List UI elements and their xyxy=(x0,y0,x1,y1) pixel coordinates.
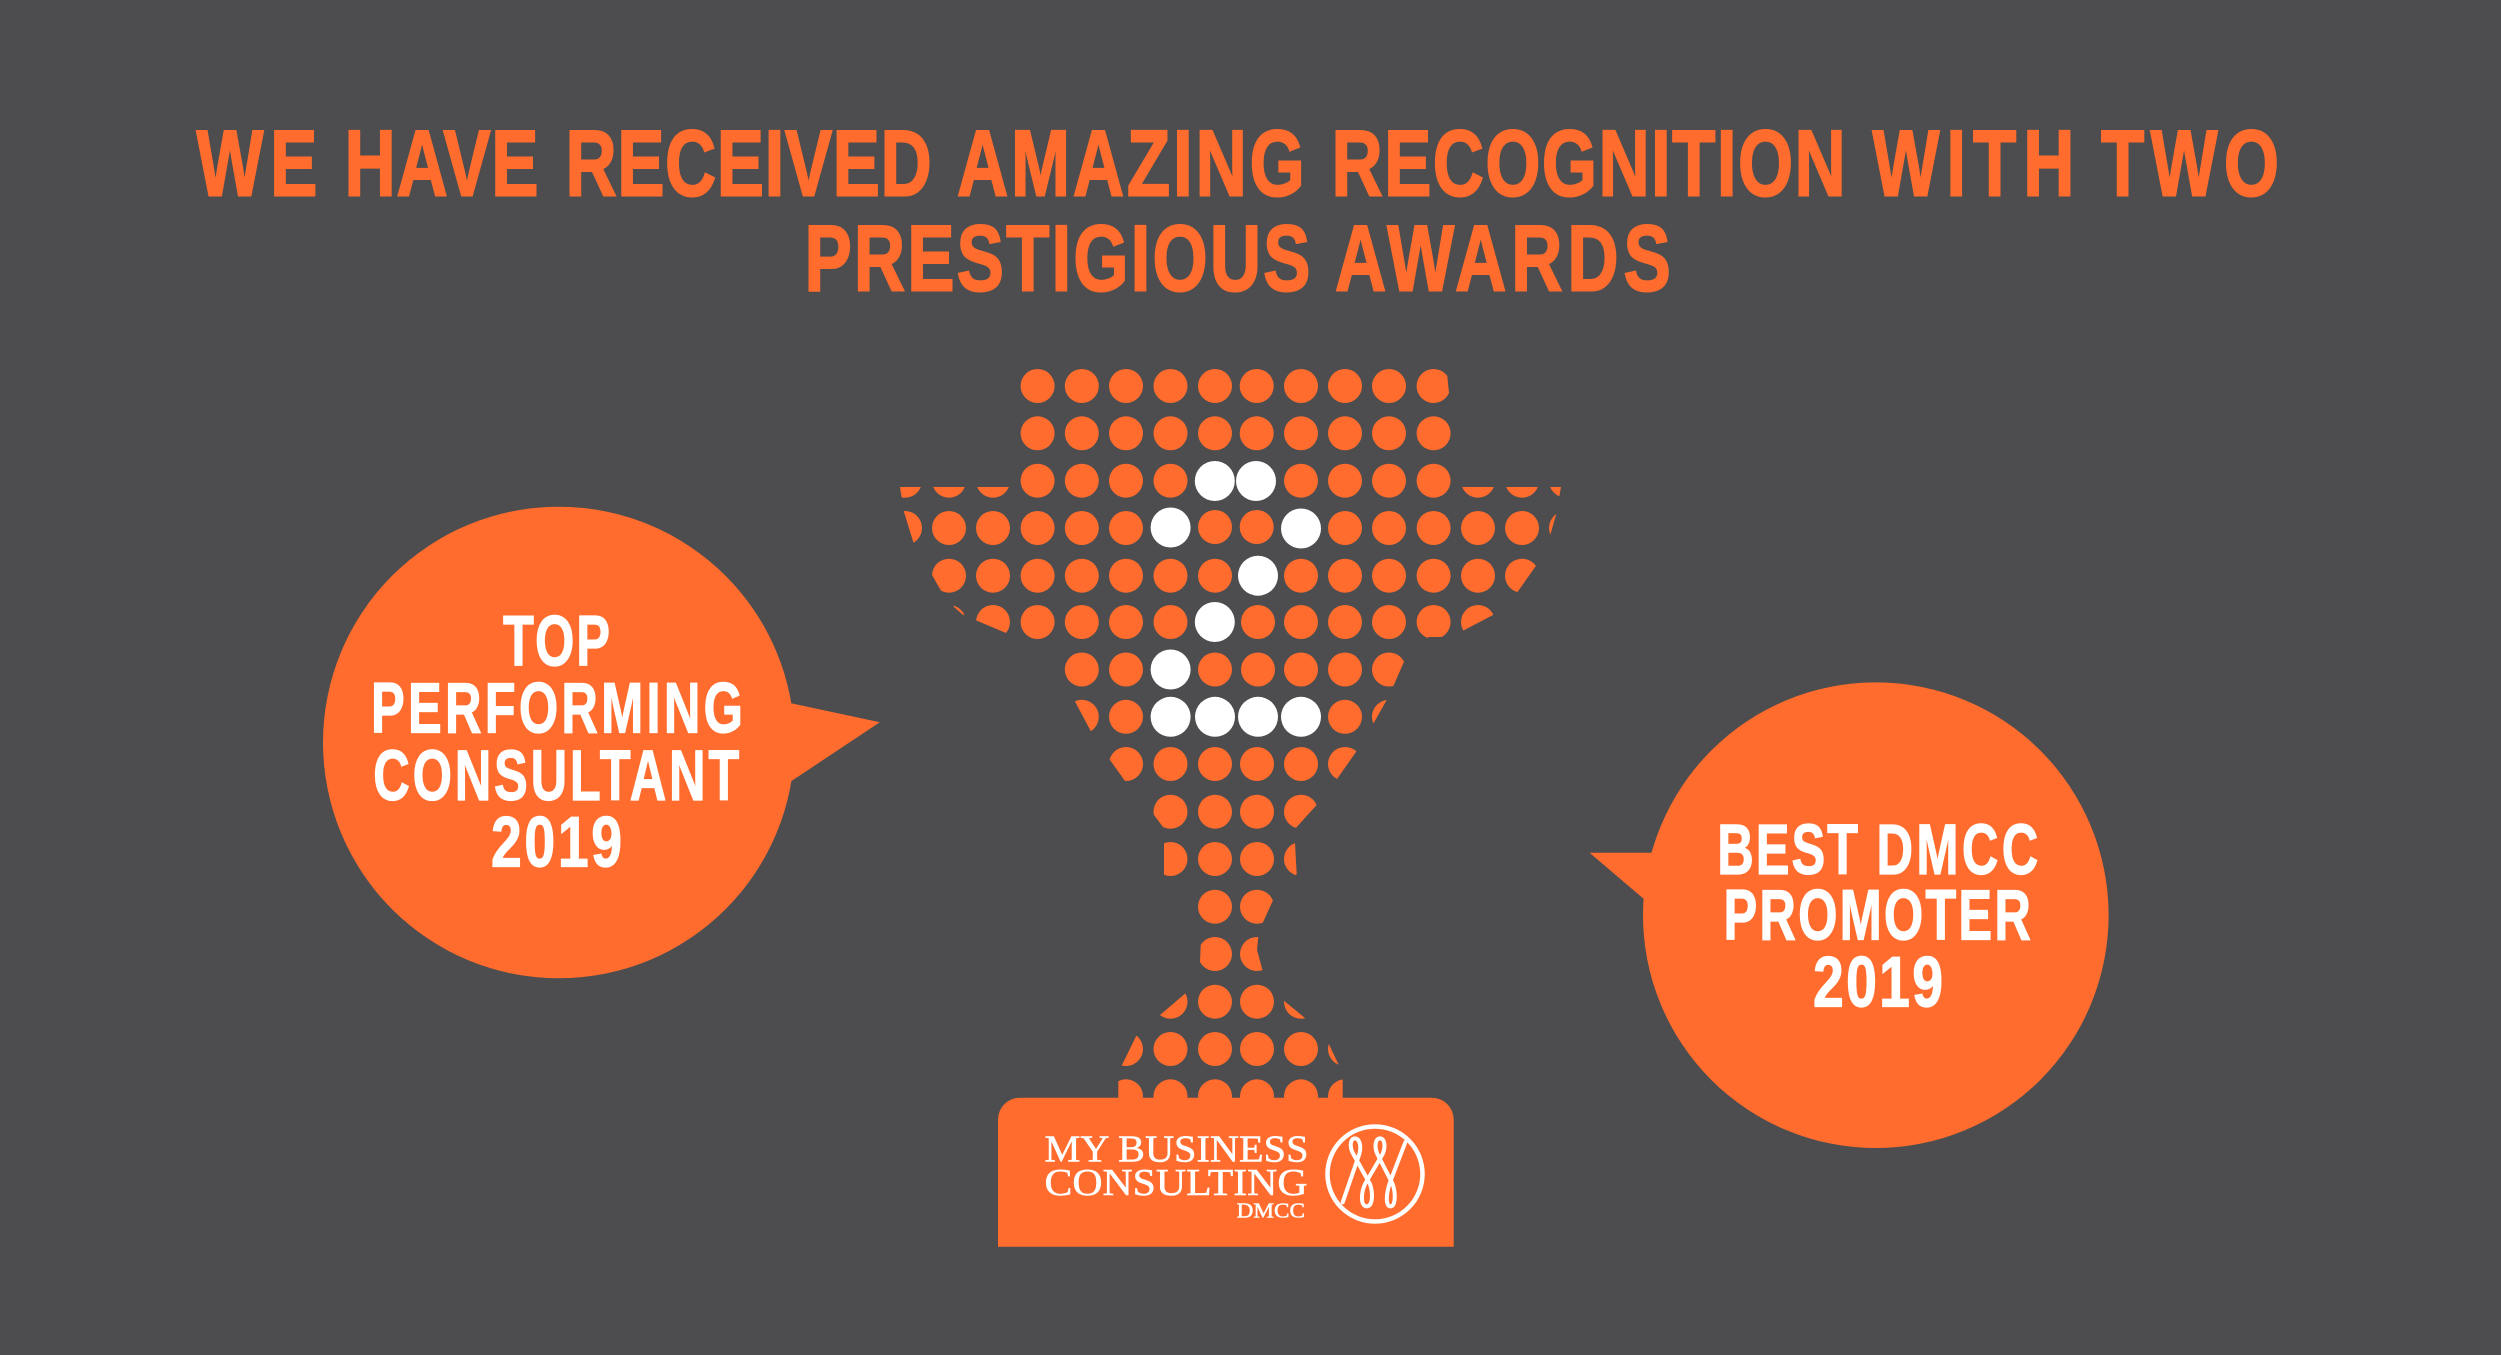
title: AWARDS xyxy=(1335,206,1671,311)
icon: dotted trophy xyxy=(888,369,1583,1247)
award text: top performing consultant 2019 xyxy=(371,602,743,882)
panel: left award speech bubble xyxy=(323,507,880,978)
award text: best dmcc promoter 2019 xyxy=(1717,811,2038,1022)
title: RECOGNITION xyxy=(1332,111,1846,216)
trophy cup and stem dots xyxy=(888,369,1583,1113)
award text: best dmcc promoter 2019: BEST xyxy=(1717,811,1858,890)
award text: best dmcc promoter 2019: 2019 xyxy=(1813,943,1943,1022)
award text: top performing consultant 2019: 2019 xyxy=(491,803,622,882)
white dots forming the number 2 xyxy=(1151,461,1321,737)
title: TWO xyxy=(2101,111,2279,216)
award text: best dmcc promoter 2019: DMCC xyxy=(1876,811,2038,890)
title xyxy=(196,111,2279,311)
panel: right award speech bubble xyxy=(1590,682,2109,1148)
bubble shape: best dmcc promoter xyxy=(1590,682,2109,1148)
award text: best dmcc promoter 2019: PROMOTER xyxy=(1724,876,2031,955)
title: WITH xyxy=(1872,111,2074,216)
title: HAVE xyxy=(344,111,539,216)
title: WE xyxy=(196,111,317,216)
trophy base with logo xyxy=(998,1098,1454,1247)
title: AMAZING xyxy=(957,111,1305,216)
award text: top performing consultant 2019: TOP xyxy=(503,602,610,682)
logo wordmark: DMCC xyxy=(1237,1198,1305,1222)
logo wordmark: CONSULTING xyxy=(1044,1162,1308,1204)
icon: logo emblem xyxy=(1328,1126,1422,1222)
logo wordmark: MY BUSINESS xyxy=(1044,1129,1308,1171)
base plate xyxy=(998,1098,1454,1247)
title: RECEIVED xyxy=(566,111,932,216)
award text: top performing consultant 2019: PERFORMING xyxy=(371,669,743,749)
award text: top performing consultant 2019: CONSULTANT xyxy=(373,737,739,816)
logo wordmark xyxy=(1044,1129,1308,1222)
bubble shape: top performing consultant xyxy=(323,507,880,978)
title: PRESTIGIOUS xyxy=(804,206,1310,311)
